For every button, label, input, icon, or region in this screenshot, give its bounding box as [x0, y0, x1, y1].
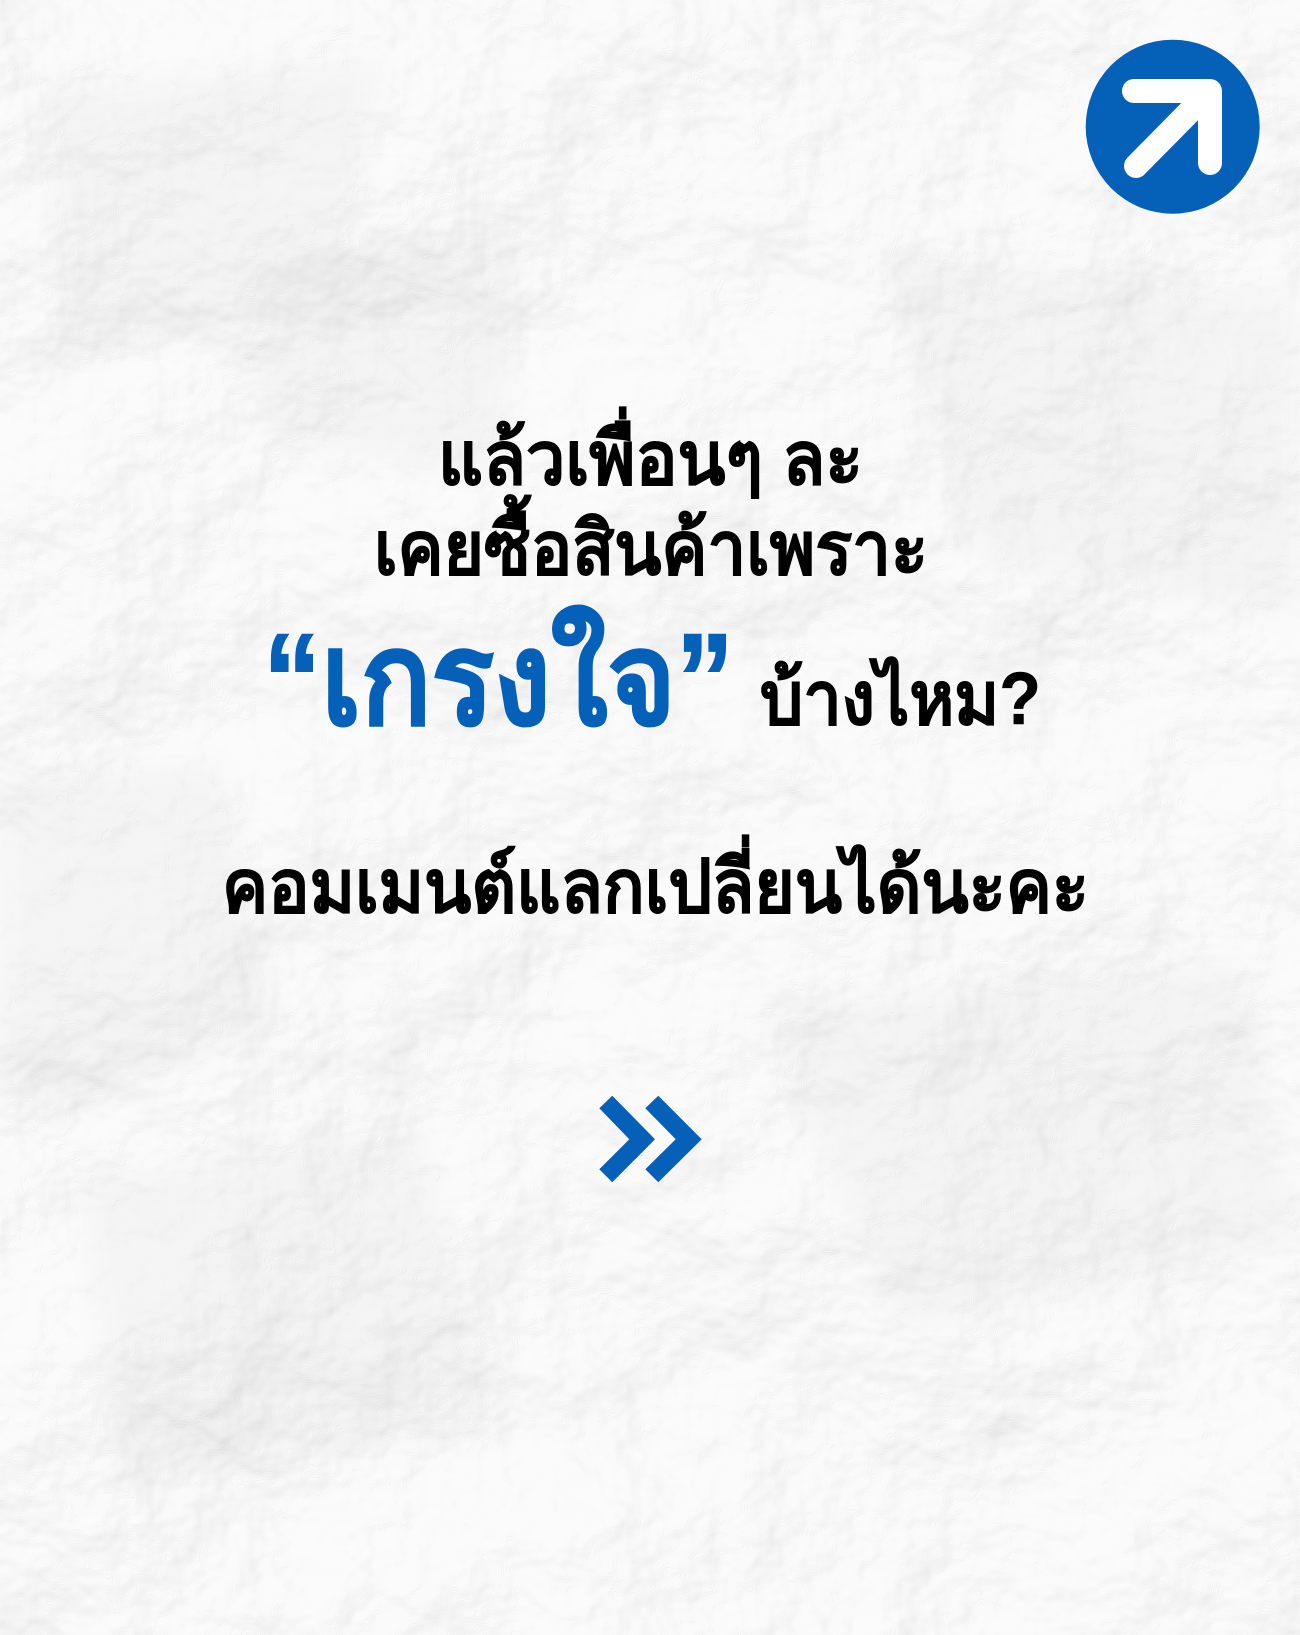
heading line: first question line: แล้วเพื่อนๆ ละ — [438, 406, 863, 500]
icon: blue circle with up-right arrow — [1086, 40, 1260, 214]
call to comment text: คอมเมนต์แลกเปลี่ยนได้นะคะ — [222, 834, 1089, 928]
highlighted word: “เกรงใจ” — [263, 605, 734, 752]
heading line: question ending: บ้างไหม? — [760, 655, 1041, 740]
icon: double chevron arrow — [599, 1096, 702, 1182]
heading line: second question line: เคยซื้อสินค้าเพราะ — [374, 494, 928, 590]
